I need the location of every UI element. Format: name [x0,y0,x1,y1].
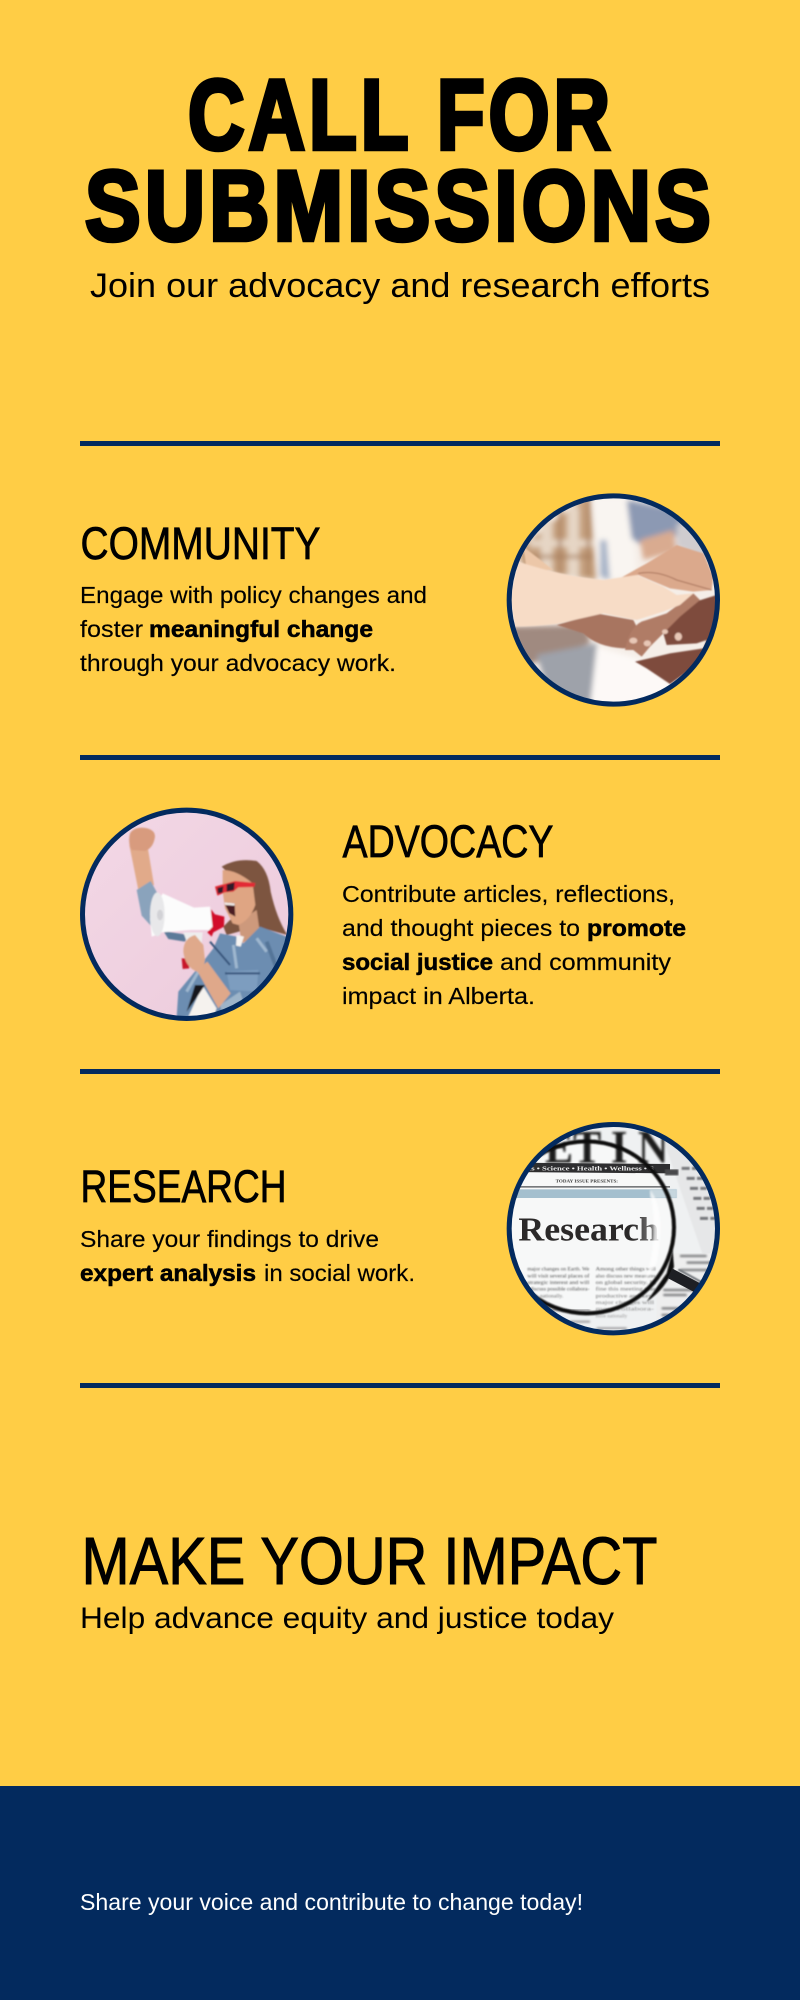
hair [222,860,287,935]
newspaper columns: on global security. In [596,1281,657,1286]
tee [236,935,244,947]
newspaper columns: more collabora- [596,1308,655,1313]
newspaper columns: major changes will [596,1301,655,1306]
text block: advocacy description: promote [587,915,686,941]
forearm and hand [197,962,231,1008]
panel: advocacy [77,805,686,1025]
newspaper columns: major changes on Earth. We [527,1268,589,1273]
text block: community description: meaningful change [149,616,373,642]
icon: woman with megaphone photo [77,805,297,1025]
subtitle: Join our advocacy and research efforts [90,267,710,305]
lower right dark hands [635,595,720,684]
neck [238,910,260,943]
newspaper columns: discuss possible collabora- [530,1288,590,1293]
text block: advocacy description: and thought pieces to [342,915,580,941]
heading: research: RESEARCH [80,1161,286,1212]
panel: community [80,490,723,710]
heading: advocacy: ADVOCACY [342,816,554,867]
magnifier ring and handle [534,1138,678,1316]
text block: advocacy description: impact in Alberta. [342,983,535,1009]
heading: community: COMMUNITY [80,518,320,569]
top right hand [620,545,713,592]
icon: newspaper and magnifying glass photo: es • Science • Health • Wellness • S [527,1165,655,1172]
newspaper columns: nationally. [540,1294,563,1299]
text block: advocacy description [342,881,686,1009]
icon: newspaper and magnifying glass photo [499,1120,723,1340]
newspaper columns: strategic interest and will [527,1281,590,1286]
panel: research [80,1120,723,1340]
sunglasses [215,881,255,896]
newspaper columns: Among other things will [596,1268,657,1273]
text block: community description: Engage with policy changes and [80,582,427,608]
newspaper columns: productive and key [596,1294,653,1299]
sleeve [137,881,158,927]
raised arm [129,845,154,890]
newspaper columns: more nationally [596,1314,628,1319]
text block: research description: in social work. [264,1260,415,1286]
title [85,59,715,261]
lens area [656,1253,667,1274]
panel: footer band [0,1786,800,2000]
footer text: Share your voice and contribute to change today! [80,1889,583,1915]
blurred masthead: ET I N [545,1122,669,1174]
circle border [82,810,291,1018]
icon: newspaper and magnifying glass photo: TODAY ISSUE PRESENTS: [556,1178,619,1183]
text block: advocacy description: Contribute articles, reflections, [342,881,675,907]
text block: community description: through your advocacy work. [80,650,396,676]
icon: newspaper and magnifying glass photo: Research [518,1212,659,1249]
circle border [509,496,717,704]
circle border [509,1124,717,1333]
text block: research description: expert analysis [80,1260,256,1286]
main light arm [510,562,693,627]
newspaper columns: also discuss new measures [596,1274,656,1279]
lens glare [645,1191,658,1278]
newspaper columns: fine this meeting was [596,1288,656,1293]
text block: advocacy description: and community [500,949,672,975]
newspaper columns: will visit several places of [527,1274,590,1279]
heading: make your impact: MAKE YOUR IMPACT [82,1524,658,1599]
dark under hand [557,613,647,648]
text block: community description: foster [80,616,143,642]
newspaper columns [527,1268,657,1319]
text block: community description [80,582,427,676]
text block: call to action subheading: Help advance equity and justice today [80,1602,614,1635]
title: CALL FOR [188,59,614,170]
text block: advocacy description: social justice [342,949,493,975]
text block: research description: Share your findings to drive [80,1226,379,1252]
icon: stacked hands photo [503,490,723,710]
face [223,870,255,925]
text block: research description [80,1226,415,1286]
jacket [177,927,287,1022]
megaphone [183,932,203,943]
